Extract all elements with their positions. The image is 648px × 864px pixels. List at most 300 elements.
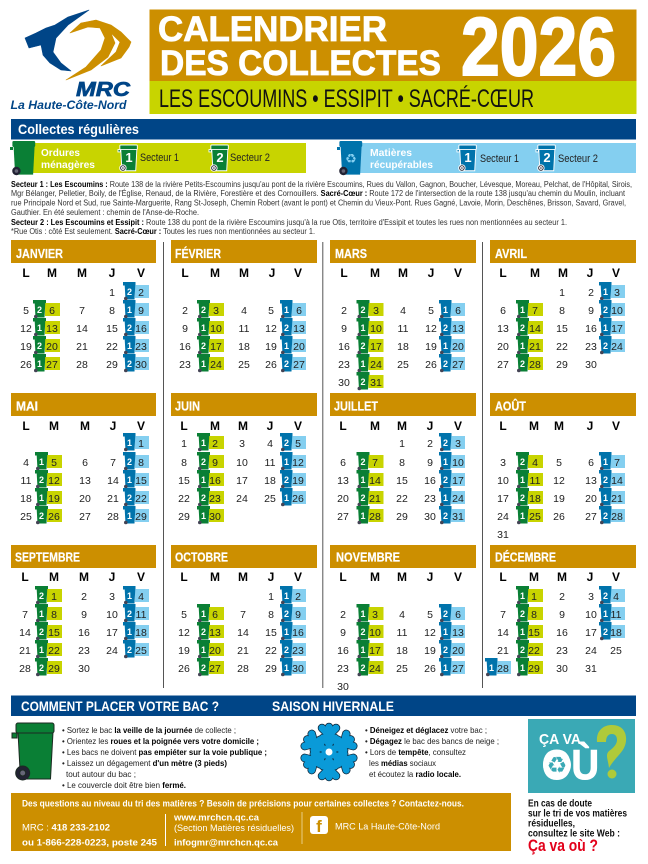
month: août: 1 bbox=[520, 475, 525, 485]
month: juillet bbox=[330, 393, 476, 524]
month: juin: 22 bbox=[178, 493, 190, 505]
month: septembre: 1 bbox=[127, 627, 132, 637]
month: avril: 30 bbox=[585, 359, 597, 371]
month: janvier: 1 bbox=[37, 359, 42, 369]
month: juillet: V bbox=[454, 419, 462, 433]
month: janvier: 7 bbox=[79, 305, 85, 317]
month: juin: 3 bbox=[239, 438, 245, 450]
month: décembre bbox=[485, 545, 636, 676]
month: juin: 1 bbox=[201, 511, 206, 521]
month: mars: 20 bbox=[452, 341, 464, 353]
month: janvier: 5 bbox=[23, 305, 29, 317]
month: novembre: 3 bbox=[372, 609, 378, 621]
legend: matières récupérables: Matières bbox=[370, 147, 412, 159]
month: janvier: 2 bbox=[127, 323, 132, 333]
month: juin: 15 bbox=[178, 475, 190, 487]
month: septembre: 1 bbox=[39, 645, 44, 655]
month: septembre: 8 bbox=[51, 609, 57, 621]
month: novembre: 16 bbox=[337, 645, 349, 657]
month: septembre: 2 bbox=[39, 591, 44, 601]
month: novembre: 1 bbox=[443, 627, 448, 637]
month: mai: 12 bbox=[48, 475, 60, 487]
month: juin: 1 bbox=[284, 493, 289, 503]
month: juillet: 21 bbox=[369, 493, 381, 505]
month: avril: 1 bbox=[603, 287, 608, 297]
month: juin: 4 bbox=[267, 438, 273, 450]
month: janvier: 27 bbox=[46, 359, 58, 371]
month: janvier: J bbox=[109, 266, 115, 280]
month: mai: 22 bbox=[135, 493, 147, 505]
month: août: 17 bbox=[497, 493, 509, 505]
month: novembre: 11 bbox=[397, 627, 408, 639]
legend: matières récupérables: 2 bbox=[543, 150, 551, 165]
month: décembre: 2 bbox=[520, 609, 525, 619]
month: mars: 2 bbox=[360, 305, 366, 315]
month: juillet: 10 bbox=[452, 457, 464, 469]
month: avril: AVRIL bbox=[495, 247, 527, 261]
month: septembre: 16 bbox=[78, 627, 90, 639]
month: octobre: 15 bbox=[265, 627, 277, 639]
month: mai: 13 bbox=[79, 475, 91, 487]
month: février: 11 bbox=[239, 323, 250, 335]
month: décembre: 9 bbox=[559, 609, 565, 621]
month: septembre: M bbox=[49, 570, 59, 584]
month: juillet: 16 bbox=[424, 475, 436, 487]
month: août: 21 bbox=[611, 493, 623, 505]
month: novembre: 4 bbox=[399, 609, 405, 621]
month: février: 2 bbox=[284, 359, 289, 369]
month: janvier: 19 bbox=[20, 341, 32, 353]
month: mai: 4 bbox=[23, 457, 29, 469]
month: mai: 5 bbox=[51, 457, 57, 469]
month: décembre: 1 bbox=[520, 663, 525, 673]
month: mai: 1 bbox=[39, 493, 44, 503]
month: juillet: 2 bbox=[443, 475, 448, 485]
month: septembre: 2 bbox=[127, 609, 132, 619]
month: janvier: V bbox=[137, 266, 145, 280]
month: janvier: 28 bbox=[76, 359, 88, 371]
month: février: 23 bbox=[179, 359, 191, 371]
month: mars: 16 bbox=[338, 341, 350, 353]
month: mars: 2 bbox=[360, 377, 366, 387]
month: février: 17 bbox=[210, 341, 222, 353]
month: octobre: 30 bbox=[292, 663, 304, 675]
heading bar: comment placer votre bac / saison hivernale: SAISON HIVERNALE bbox=[272, 698, 394, 714]
month: août: 20 bbox=[585, 493, 597, 505]
month: novembre: 2 bbox=[443, 645, 448, 655]
legend: ordures ménagères: 1 bbox=[125, 150, 133, 165]
bin placement instructions bbox=[62, 725, 267, 790]
bin placement instructions: • Sortez le bac la veille de la journée de collecte ; bbox=[62, 725, 236, 735]
month: juillet: 13 bbox=[337, 475, 349, 487]
month: mars: 1 bbox=[443, 305, 448, 315]
logo: ça va où bbox=[528, 719, 635, 793]
month: septembre: 1 bbox=[127, 591, 132, 601]
month: mai: 1 bbox=[39, 457, 44, 467]
heading bar: comment placer votre bac / saison hivernale bbox=[11, 696, 636, 716]
text: ça va où message: consultez le site Web : bbox=[528, 828, 620, 840]
month: décembre: 1 bbox=[603, 609, 608, 619]
month: avril: 6 bbox=[500, 305, 506, 317]
month: décembre: 22 bbox=[528, 645, 540, 657]
year 2026: 2026 bbox=[461, 0, 616, 93]
month: mars: 1 bbox=[360, 359, 366, 369]
month: mai: 1 bbox=[127, 511, 132, 521]
month: septembre: 10 bbox=[106, 609, 118, 621]
month: octobre: 16 bbox=[292, 627, 304, 639]
month: juillet: 2 bbox=[360, 457, 366, 467]
month: novembre: J bbox=[427, 570, 433, 584]
month: juillet: 1 bbox=[399, 438, 405, 450]
sector descriptions: Secteur 2 : Les Escoumins et Essipit : Route 138 du pont de la rivière Escoumins jusqu'à la rue Otis, territoire d'Essipit et toutes les rues non mentionnées au secteur 1. bbox=[11, 218, 567, 227]
month: mai: 11 bbox=[21, 475, 32, 487]
month: juillet: 31 bbox=[452, 511, 464, 523]
month: janvier: 13 bbox=[46, 323, 58, 335]
month: juin: L bbox=[180, 419, 188, 433]
month: avril: 16 bbox=[585, 323, 597, 335]
month: octobre: 1 bbox=[201, 645, 206, 655]
month: février: 1 bbox=[284, 305, 289, 315]
month: octobre: 29 bbox=[265, 663, 277, 675]
month: janvier: 26 bbox=[20, 359, 32, 371]
month: août: 19 bbox=[553, 493, 565, 505]
month: août: L bbox=[499, 419, 507, 433]
month: juillet: 1 bbox=[443, 457, 448, 467]
month: septembre: 14 bbox=[19, 627, 31, 639]
month: décembre: M bbox=[557, 570, 567, 584]
month: juin: 10 bbox=[236, 457, 248, 469]
legend: matières récupérables: 1 bbox=[464, 150, 472, 165]
month: avril: 15 bbox=[556, 323, 568, 335]
month: avril: M bbox=[558, 266, 568, 280]
month: mars: 2 bbox=[443, 323, 448, 333]
month: novembre: M bbox=[370, 570, 380, 584]
month: janvier: L bbox=[22, 266, 30, 280]
month: août: M bbox=[554, 419, 564, 433]
month: août: 1 bbox=[520, 511, 525, 521]
month: décembre: M bbox=[529, 570, 539, 584]
question mark bbox=[597, 725, 626, 768]
month: avril: 3 bbox=[614, 287, 620, 299]
logo: MRC La Haute-Côte-Nord: La Haute-Côte-Nord bbox=[10, 98, 127, 112]
month: juin: 1 bbox=[201, 475, 206, 485]
month: mars: 1 bbox=[443, 341, 448, 351]
month: septembre: 2 bbox=[39, 627, 44, 637]
month: décembre: 1 bbox=[520, 591, 525, 601]
month: avril: 24 bbox=[611, 341, 623, 353]
month: août: V bbox=[612, 419, 620, 433]
month: avril: 20 bbox=[497, 341, 509, 353]
month: février: 5 bbox=[268, 305, 274, 317]
month: décembre: V bbox=[612, 570, 620, 584]
sector descriptions: Mgr Bélanger, Pelletier, Boily, de l'Église, Renaud, de la Rivière, Forestière et des Cornouillers. Sacré-Cœur : Route 172 de l'intersection de la route 138 jusqu'au chemin du Moulin, incluant bbox=[11, 189, 626, 198]
panel: contact: infogmr@mrchcn.qc.ca bbox=[174, 838, 279, 848]
heading: collectes régulières bbox=[11, 119, 636, 140]
month: octobre: 26 bbox=[178, 663, 190, 675]
month: octobre: 2 bbox=[201, 627, 206, 637]
month: mai bbox=[11, 393, 156, 524]
month: mai: 15 bbox=[135, 475, 147, 487]
month: novembre: 2 bbox=[443, 609, 448, 619]
month: juillet: JUILLET bbox=[334, 400, 378, 414]
month: février bbox=[171, 240, 317, 372]
month: juillet: 20 bbox=[337, 493, 349, 505]
text: ça va où message: En cas de doute bbox=[528, 798, 592, 810]
month: novembre: 27 bbox=[452, 663, 464, 675]
month: septembre: 1 bbox=[51, 591, 57, 603]
month: juillet: L bbox=[339, 419, 347, 433]
month: février: 25 bbox=[238, 359, 250, 371]
month: mai: V bbox=[137, 419, 145, 433]
month: février: M bbox=[210, 266, 220, 280]
month: novembre: 20 bbox=[452, 645, 464, 657]
month: avril: 10 bbox=[611, 305, 623, 317]
month: octobre: J bbox=[268, 570, 274, 584]
month: avril: 8 bbox=[559, 305, 565, 317]
month: août: AOÛT bbox=[495, 398, 526, 414]
month: février: 1 bbox=[284, 341, 289, 351]
month: décembre: 25 bbox=[610, 645, 622, 657]
month: décembre: 8 bbox=[531, 609, 537, 621]
month: mars: 25 bbox=[397, 359, 409, 371]
month: juin: 30 bbox=[209, 511, 221, 523]
panel: contact bbox=[11, 793, 511, 851]
month: septembre: 23 bbox=[78, 645, 90, 657]
month: avril: 2 bbox=[603, 341, 608, 351]
month: octobre: 23 bbox=[292, 645, 304, 657]
bin placement instructions: • Le couvercle doit être bien fermé. bbox=[62, 780, 186, 790]
month: septembre: L bbox=[21, 570, 29, 584]
month: février: 3 bbox=[213, 305, 219, 317]
month: octobre: 2 bbox=[201, 663, 206, 673]
month: novembre: 2 bbox=[360, 663, 366, 673]
month: novembre: 26 bbox=[424, 663, 436, 675]
month: juillet: 30 bbox=[424, 511, 436, 523]
month: septembre: 15 bbox=[48, 627, 60, 639]
month: avril: 14 bbox=[529, 323, 541, 335]
title: calendrier: CALENDRIER bbox=[158, 10, 387, 49]
logo: ça va où: ÇA VA bbox=[539, 731, 581, 748]
legend: matières récupérables: Secteur 1 bbox=[480, 153, 519, 165]
month: avril: J bbox=[587, 266, 593, 280]
month: octobre: 2 bbox=[295, 591, 301, 603]
month: décembre: 2 bbox=[603, 627, 608, 637]
month: novembre bbox=[330, 545, 476, 693]
month: mai: 27 bbox=[79, 511, 91, 523]
month: avril: 9 bbox=[588, 305, 594, 317]
month: juin: 17 bbox=[236, 475, 248, 487]
month: septembre: 9 bbox=[81, 609, 87, 621]
month: juin: 19 bbox=[292, 475, 304, 487]
month: août: 7 bbox=[614, 457, 620, 469]
month: juillet: 9 bbox=[427, 457, 433, 469]
month: janvier: 23 bbox=[135, 341, 147, 353]
month: août: M bbox=[529, 419, 539, 433]
month: juillet: 1 bbox=[360, 511, 366, 521]
month: août: 5 bbox=[556, 457, 562, 469]
month: juillet: 23 bbox=[424, 493, 436, 505]
month: mars: 30 bbox=[338, 377, 350, 389]
month: avril: 1 bbox=[520, 341, 525, 351]
month: février: 1 bbox=[201, 359, 206, 369]
month: mars: 4 bbox=[400, 305, 406, 317]
month: mars: J bbox=[428, 266, 434, 280]
month: août: 26 bbox=[553, 511, 565, 523]
heading bar: comment placer votre bac / saison hivernale: COMMENT PLACER VOTRE BAC ? bbox=[21, 698, 219, 714]
month: juillet: 29 bbox=[396, 511, 408, 523]
month: février: J bbox=[269, 266, 275, 280]
heading: collectes régulières: Collectes régulières bbox=[18, 122, 139, 137]
month: mars: 3 bbox=[373, 305, 379, 317]
month: novembre: 30 bbox=[337, 681, 349, 693]
month: mai: 21 bbox=[107, 493, 119, 505]
month: avril: 1 bbox=[559, 287, 565, 299]
month: mars: 11 bbox=[398, 323, 409, 335]
month: octobre: 12 bbox=[178, 627, 190, 639]
month: octobre: 2 bbox=[284, 645, 289, 655]
month: janvier: 2 bbox=[127, 359, 132, 369]
month: octobre: 1 bbox=[284, 627, 289, 637]
month: janvier: 15 bbox=[106, 323, 118, 335]
month: janvier: 29 bbox=[106, 359, 118, 371]
month: janvier: 14 bbox=[76, 323, 88, 335]
month: octobre: 8 bbox=[268, 609, 274, 621]
logo: MRC La Haute-Côte-Nord bbox=[10, 10, 131, 112]
sector descriptions bbox=[11, 180, 632, 236]
month: juin: 2 bbox=[212, 438, 218, 450]
month: mars: 5 bbox=[428, 305, 434, 317]
winter instructions: • Lors de tempête, consultez bbox=[365, 747, 466, 757]
icon: facebook bbox=[310, 816, 328, 836]
month: août: 2 bbox=[603, 511, 608, 521]
panel: contact: Des questions au niveau du tri des matières ? Besoin de précisions pour certaines collectes ? Contactez-nous. bbox=[22, 798, 464, 810]
month: juin: M bbox=[238, 419, 248, 433]
month: février: 10 bbox=[210, 323, 222, 335]
month: juillet: 22 bbox=[396, 493, 408, 505]
month: avril: 2 bbox=[588, 287, 594, 299]
month: août: 1 bbox=[603, 493, 608, 503]
month: décembre: 14 bbox=[497, 627, 509, 639]
month: mai: 2 bbox=[127, 493, 132, 503]
month: juin: 12 bbox=[292, 457, 304, 469]
month: mai: J bbox=[110, 419, 116, 433]
month: octobre: 1 bbox=[284, 591, 289, 601]
month: septembre: 7 bbox=[22, 609, 28, 621]
month: janvier: 1 bbox=[127, 341, 132, 351]
month: mai: 28 bbox=[107, 511, 119, 523]
month: janvier: 22 bbox=[106, 341, 118, 353]
month: mai: 20 bbox=[79, 493, 91, 505]
month: juillet: 17 bbox=[452, 475, 464, 487]
month: janvier: 2 bbox=[127, 287, 132, 297]
month: novembre: 17 bbox=[369, 645, 381, 657]
month: septembre: 17 bbox=[106, 627, 118, 639]
month: juillet: 28 bbox=[369, 511, 381, 523]
legend: matières récupérables: ♻ bbox=[345, 152, 357, 167]
title: des collectes: DES COLLECTES bbox=[160, 44, 441, 83]
month: septembre: 2 bbox=[127, 645, 132, 655]
month: octobre: 21 bbox=[237, 645, 249, 657]
month: mai: M bbox=[80, 419, 90, 433]
month: décembre: 28 bbox=[497, 663, 509, 675]
month: août: 28 bbox=[611, 511, 623, 523]
month: janvier: M bbox=[47, 266, 57, 280]
month: avril: L bbox=[499, 266, 507, 280]
month: novembre: 13 bbox=[452, 627, 464, 639]
month: février: 2 bbox=[201, 341, 206, 351]
month: juin: 1 bbox=[201, 438, 206, 448]
month: mai: 25 bbox=[20, 511, 32, 523]
icon: snowflake bbox=[304, 727, 354, 777]
month: mars: 18 bbox=[397, 341, 409, 353]
month: octobre: 2 bbox=[284, 609, 289, 619]
month: octobre: 1 bbox=[201, 609, 206, 619]
month: décembre: 2 bbox=[603, 591, 608, 601]
winter instructions: • Déneigez et déglacez votre bac ; bbox=[365, 725, 487, 735]
month: août: 14 bbox=[611, 475, 623, 487]
month: août: 2 bbox=[520, 457, 525, 467]
winter instructions: les médias sociaux bbox=[369, 758, 437, 768]
month: décembre: 11 bbox=[611, 609, 622, 621]
month: février: 9 bbox=[182, 323, 188, 335]
month: janvier: 2 bbox=[37, 305, 42, 315]
legend: ordures ménagères: Secteur 2 bbox=[230, 152, 270, 164]
month: mai: L bbox=[22, 419, 30, 433]
month: mai: 26 bbox=[48, 511, 60, 523]
month: avril bbox=[490, 240, 636, 372]
month: juin: 1 bbox=[181, 438, 187, 450]
month: juin: 2 bbox=[284, 438, 289, 448]
month: juin: 11 bbox=[265, 457, 276, 469]
month: janvier: 12 bbox=[20, 323, 32, 335]
month: juin: 2 bbox=[201, 457, 206, 467]
month: juin: 25 bbox=[264, 493, 276, 505]
month: juin: 2 bbox=[201, 493, 206, 503]
month: avril: 1 bbox=[520, 305, 525, 315]
month: novembre: 18 bbox=[396, 645, 408, 657]
month: mai: 1 bbox=[127, 438, 132, 448]
month: janvier: 6 bbox=[49, 305, 55, 317]
month: octobre: 19 bbox=[178, 645, 190, 657]
bin placement instructions: tout autour du bac ; bbox=[66, 769, 136, 779]
month: mars: 26 bbox=[425, 359, 437, 371]
month: août: 2 bbox=[520, 493, 525, 503]
month: juin: 5 bbox=[295, 438, 301, 450]
month: septembre: M bbox=[79, 570, 89, 584]
month: novembre: 6 bbox=[455, 609, 461, 621]
panel: contact: www.mrchcn.qc.ca bbox=[173, 812, 260, 824]
month: novembre: 1 bbox=[360, 645, 366, 655]
month: juillet: 6 bbox=[340, 457, 346, 469]
month: juillet: 2 bbox=[443, 438, 448, 448]
month: août: 31 bbox=[497, 529, 509, 541]
month: janvier: 2 bbox=[37, 341, 42, 351]
month: mars: 24 bbox=[370, 359, 382, 371]
month: mars: MARS bbox=[335, 247, 367, 261]
month: novembre: 19 bbox=[424, 645, 436, 657]
month: août bbox=[490, 393, 636, 541]
month: avril: 13 bbox=[497, 323, 509, 335]
month: septembre: 22 bbox=[48, 645, 60, 657]
month: mai: 8 bbox=[138, 457, 144, 469]
month: décembre: 10 bbox=[585, 609, 597, 621]
month: novembre: 1 bbox=[360, 609, 366, 619]
month: mai: 6 bbox=[82, 457, 88, 469]
month: décembre: 15 bbox=[528, 627, 540, 639]
month: novembre: 10 bbox=[369, 627, 381, 639]
month: décembre: J bbox=[587, 570, 593, 584]
month: juin: 1 bbox=[284, 457, 289, 467]
